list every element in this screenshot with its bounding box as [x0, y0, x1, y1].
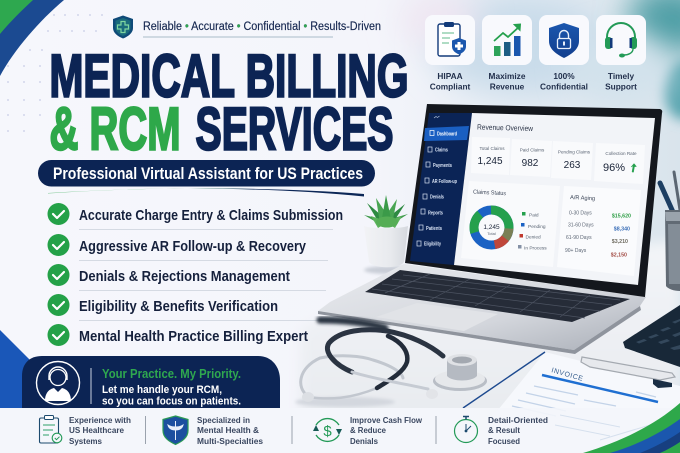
item 3: Denials & Rejections Management — [79, 268, 290, 285]
service checklist — [48, 203, 343, 346]
badge: HIPAA: Compliant — [430, 82, 471, 92]
sidebar menu: Eligibility — [424, 242, 441, 248]
donut legend: In Process — [524, 246, 547, 252]
callout body: Let me handle your RCM, — [102, 384, 222, 396]
dark inner tube — [377, 336, 407, 388]
trust badges — [425, 15, 646, 92]
badge: support — [596, 15, 646, 92]
A/R aging card: $3,210 — [612, 239, 628, 245]
badge: HIPAA: HIPAA — [437, 71, 463, 81]
subtitle pill: Professional Virtual Assistant for US Practices — [53, 165, 363, 183]
calculator — [623, 305, 680, 367]
feature: US healthcare — [40, 415, 131, 446]
A/R aging card: 31-60 Days — [568, 222, 594, 228]
feature: detail oriented: Focused — [488, 436, 520, 446]
feature: cash flow — [313, 415, 422, 446]
A/R aging card: A/R Aging — [570, 195, 595, 202]
screen sidebar — [410, 113, 472, 265]
sidebar menu: Reports — [428, 210, 443, 216]
A/R aging card: $8,340 — [614, 226, 630, 232]
badge: revenue — [482, 15, 532, 92]
top left corner swoosh — [0, 0, 64, 76]
badge: revenue: Revenue — [490, 82, 525, 92]
claims status card: 1,245 — [483, 224, 500, 231]
claims status card: Total — [487, 231, 496, 236]
stat card: collection rate — [594, 143, 645, 184]
feature: cash flow: & Reduce — [350, 425, 386, 435]
invoice word: INVOICE — [550, 367, 584, 383]
stat card: total claims — [471, 137, 510, 175]
feature: mental health: Mental Health & — [197, 425, 259, 435]
donut chart — [467, 203, 516, 252]
A/R aging card: 0-30 Days — [569, 210, 592, 216]
silver binaural wire — [301, 356, 403, 396]
donut legend — [518, 212, 547, 252]
callout headline: Your Practice. My Priority. — [102, 367, 241, 381]
badge: support: Timely — [608, 71, 634, 81]
A/R aging card — [557, 186, 641, 276]
feature: detail oriented: & Result — [488, 425, 520, 435]
title: & RCM — [50, 96, 180, 162]
donut legend: Paid — [529, 212, 539, 218]
title: SERVICES — [196, 96, 394, 162]
item 2 — [48, 234, 307, 256]
invoice clipboard — [463, 352, 680, 453]
feature: US healthcare: US Healthcare — [69, 425, 124, 435]
item 1 — [48, 203, 343, 225]
screen bezel — [405, 104, 662, 297]
badge: confidential: 100% — [553, 71, 575, 81]
donut legend: Denied — [526, 234, 541, 240]
plant in white pot — [364, 195, 416, 274]
sidebar menu: Denials — [430, 194, 444, 200]
title: MEDICAL BILLING — [50, 42, 408, 110]
badge: HIPAA — [425, 15, 475, 92]
callout — [22, 356, 280, 408]
sidebar menu: Dashboard — [437, 132, 457, 138]
stat card: total claims: Total Claims — [479, 146, 505, 151]
item 4 — [48, 294, 278, 316]
laptop — [318, 104, 662, 354]
feature: US healthcare: Systems — [69, 436, 102, 446]
feature: cash flow: Improve Cash Flow — [350, 415, 422, 425]
item 4: Eligibility & Benefits Verification — [79, 298, 278, 315]
bottom feature strip — [0, 408, 680, 453]
item 2: Aggressive AR Follow-up & Recovery — [79, 238, 307, 255]
tagline — [113, 16, 381, 38]
pen cup — [660, 172, 680, 291]
sidebar menu: Claims — [435, 148, 448, 154]
stethoscope — [295, 320, 487, 407]
sidebar menu — [417, 116, 469, 248]
icon: agent avatar — [36, 362, 80, 404]
item 5 — [48, 324, 308, 346]
A/R aging card: $2,150 — [611, 252, 627, 258]
left blue wedge — [0, 330, 30, 408]
item 5: Mental Health Practice Billing Expert — [79, 328, 308, 345]
bottom right corner swoosh — [583, 403, 680, 453]
title — [50, 42, 408, 162]
claims status card — [461, 181, 560, 267]
feature: mental health — [163, 415, 263, 446]
stat card: total claims: 1,245 — [477, 156, 503, 167]
stat card: pending claims: Pending Claims — [558, 150, 591, 154]
stat card: pending claims: 263 — [564, 160, 581, 171]
feature: mental health: Specialized in — [197, 415, 250, 425]
screen content area — [454, 113, 655, 285]
stat card: paid claims: Paid Claims — [520, 148, 545, 152]
A/R aging card: 61-90 Days — [566, 235, 592, 241]
A/R aging card: 90+ Days — [565, 248, 587, 254]
badge: revenue: Maximize — [489, 71, 526, 81]
badge: support: Support — [605, 82, 637, 92]
feature: cash flow: Denials — [350, 436, 378, 446]
stat card: paid claims — [510, 139, 552, 177]
laptop base — [318, 264, 646, 354]
stat card: collection rate: Collection Rate — [605, 151, 637, 156]
stat card: collection rate: 96% — [603, 162, 625, 174]
feature: detail oriented: Detail-Oriented — [488, 415, 548, 425]
badge: confidential — [539, 15, 589, 92]
item 3 — [48, 264, 290, 286]
feature: US healthcare: Experience with — [69, 415, 131, 425]
callout: so you can focus on patients. — [102, 396, 241, 408]
revenue overview heading: Revenue Overview — [477, 123, 534, 133]
tagline text: Reliable • Accurate • Confidential • Results-Driven — [143, 21, 381, 33]
subtitle pill — [38, 160, 375, 196]
sidebar menu: Patients — [426, 226, 442, 232]
feature: mental health: Multi-Specialties — [197, 436, 263, 446]
A/R aging card: $15,620 — [612, 214, 631, 220]
item 1: Accurate Charge Entry & Claims Submission — [79, 207, 343, 224]
dot grid decoration — [7, 14, 103, 132]
badge: confidential: Confidential — [540, 82, 588, 92]
donut legend: Pending — [528, 224, 546, 230]
feature: cash flow: $ — [323, 423, 332, 440]
sidebar menu: AR Follow-up — [432, 179, 457, 185]
icon: shield with cross — [113, 16, 133, 38]
stethoscope chest piece — [433, 354, 487, 391]
feature: detail oriented — [454, 415, 548, 446]
stat card: pending claims — [551, 141, 593, 180]
sidebar menu: Payments — [433, 163, 452, 169]
dark outer tube — [327, 330, 443, 372]
stat card: paid claims: 982 — [522, 158, 539, 169]
claims status card: Claims Status — [473, 190, 506, 197]
